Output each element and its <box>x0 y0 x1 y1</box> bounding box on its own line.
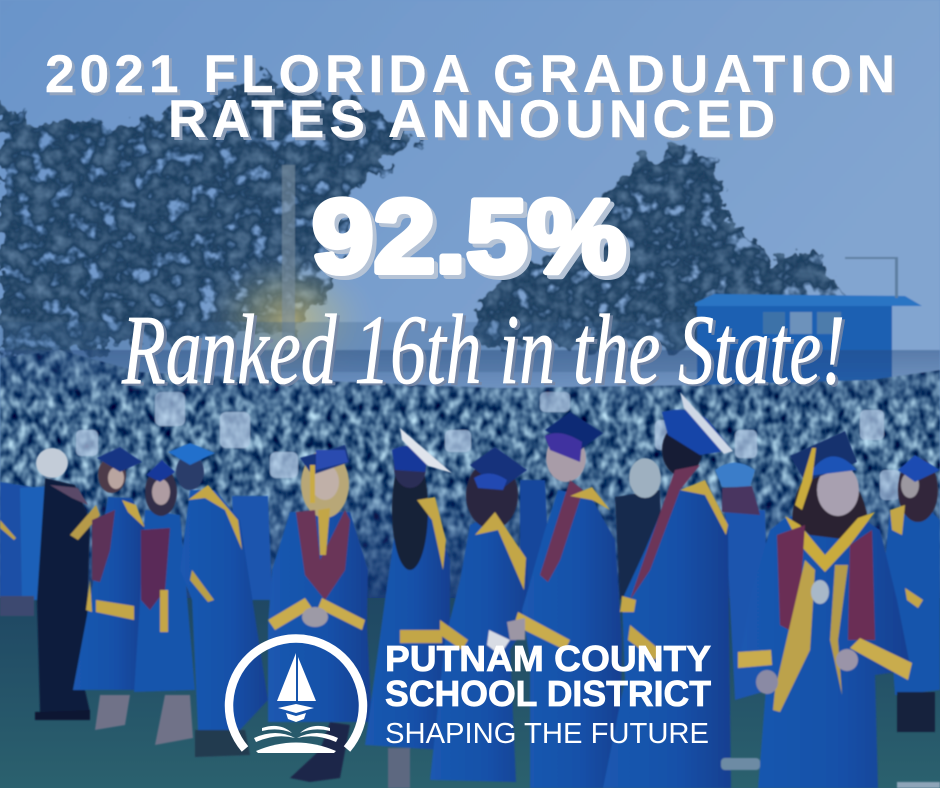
trees right <box>470 145 850 350</box>
logo wordmark <box>385 638 711 750</box>
photo background: sky, trees, stands <box>0 0 940 600</box>
crowd shading <box>0 350 940 600</box>
sky <box>0 0 940 420</box>
trees left <box>0 70 420 360</box>
title: 2021 FLORIDA GRADUATION <box>45 45 895 104</box>
graduate with decorated cap <box>365 428 452 788</box>
graduate with programme <box>430 447 530 782</box>
graduate walking in gold trim <box>507 412 622 788</box>
title <box>45 45 895 149</box>
logo wordmark: SHAPING THE FUTURE <box>385 718 709 750</box>
logo wordmark: PUTNAM COUNTY <box>385 638 711 679</box>
utility pole <box>282 165 295 345</box>
title: RATES ANNOUNCED <box>168 90 775 149</box>
bench <box>721 758 940 788</box>
graduate turned away with gold collar <box>168 443 268 757</box>
graduates <box>0 392 940 788</box>
graduate in profile <box>603 392 733 788</box>
grass field <box>0 598 940 788</box>
right background graduate <box>885 455 940 732</box>
faculty in black robe <box>35 448 90 720</box>
graduate smiling <box>134 460 195 745</box>
sun glow <box>200 250 380 390</box>
graduate with phone <box>70 447 145 730</box>
logo icon: ring, sailboat, cap and book <box>229 639 363 753</box>
class president graduate <box>738 431 912 788</box>
senior council graduate <box>268 445 372 782</box>
field fence <box>0 322 700 372</box>
crowd in stands <box>0 350 940 600</box>
logo wordmark: SCHOOL DISTRICT <box>385 673 711 714</box>
far left graduates <box>0 482 50 616</box>
crowd light shirts <box>76 392 900 500</box>
headline rate: 92.5% <box>312 179 626 295</box>
background graduates centre <box>232 458 770 700</box>
press box building <box>695 257 922 392</box>
logo <box>229 638 711 753</box>
